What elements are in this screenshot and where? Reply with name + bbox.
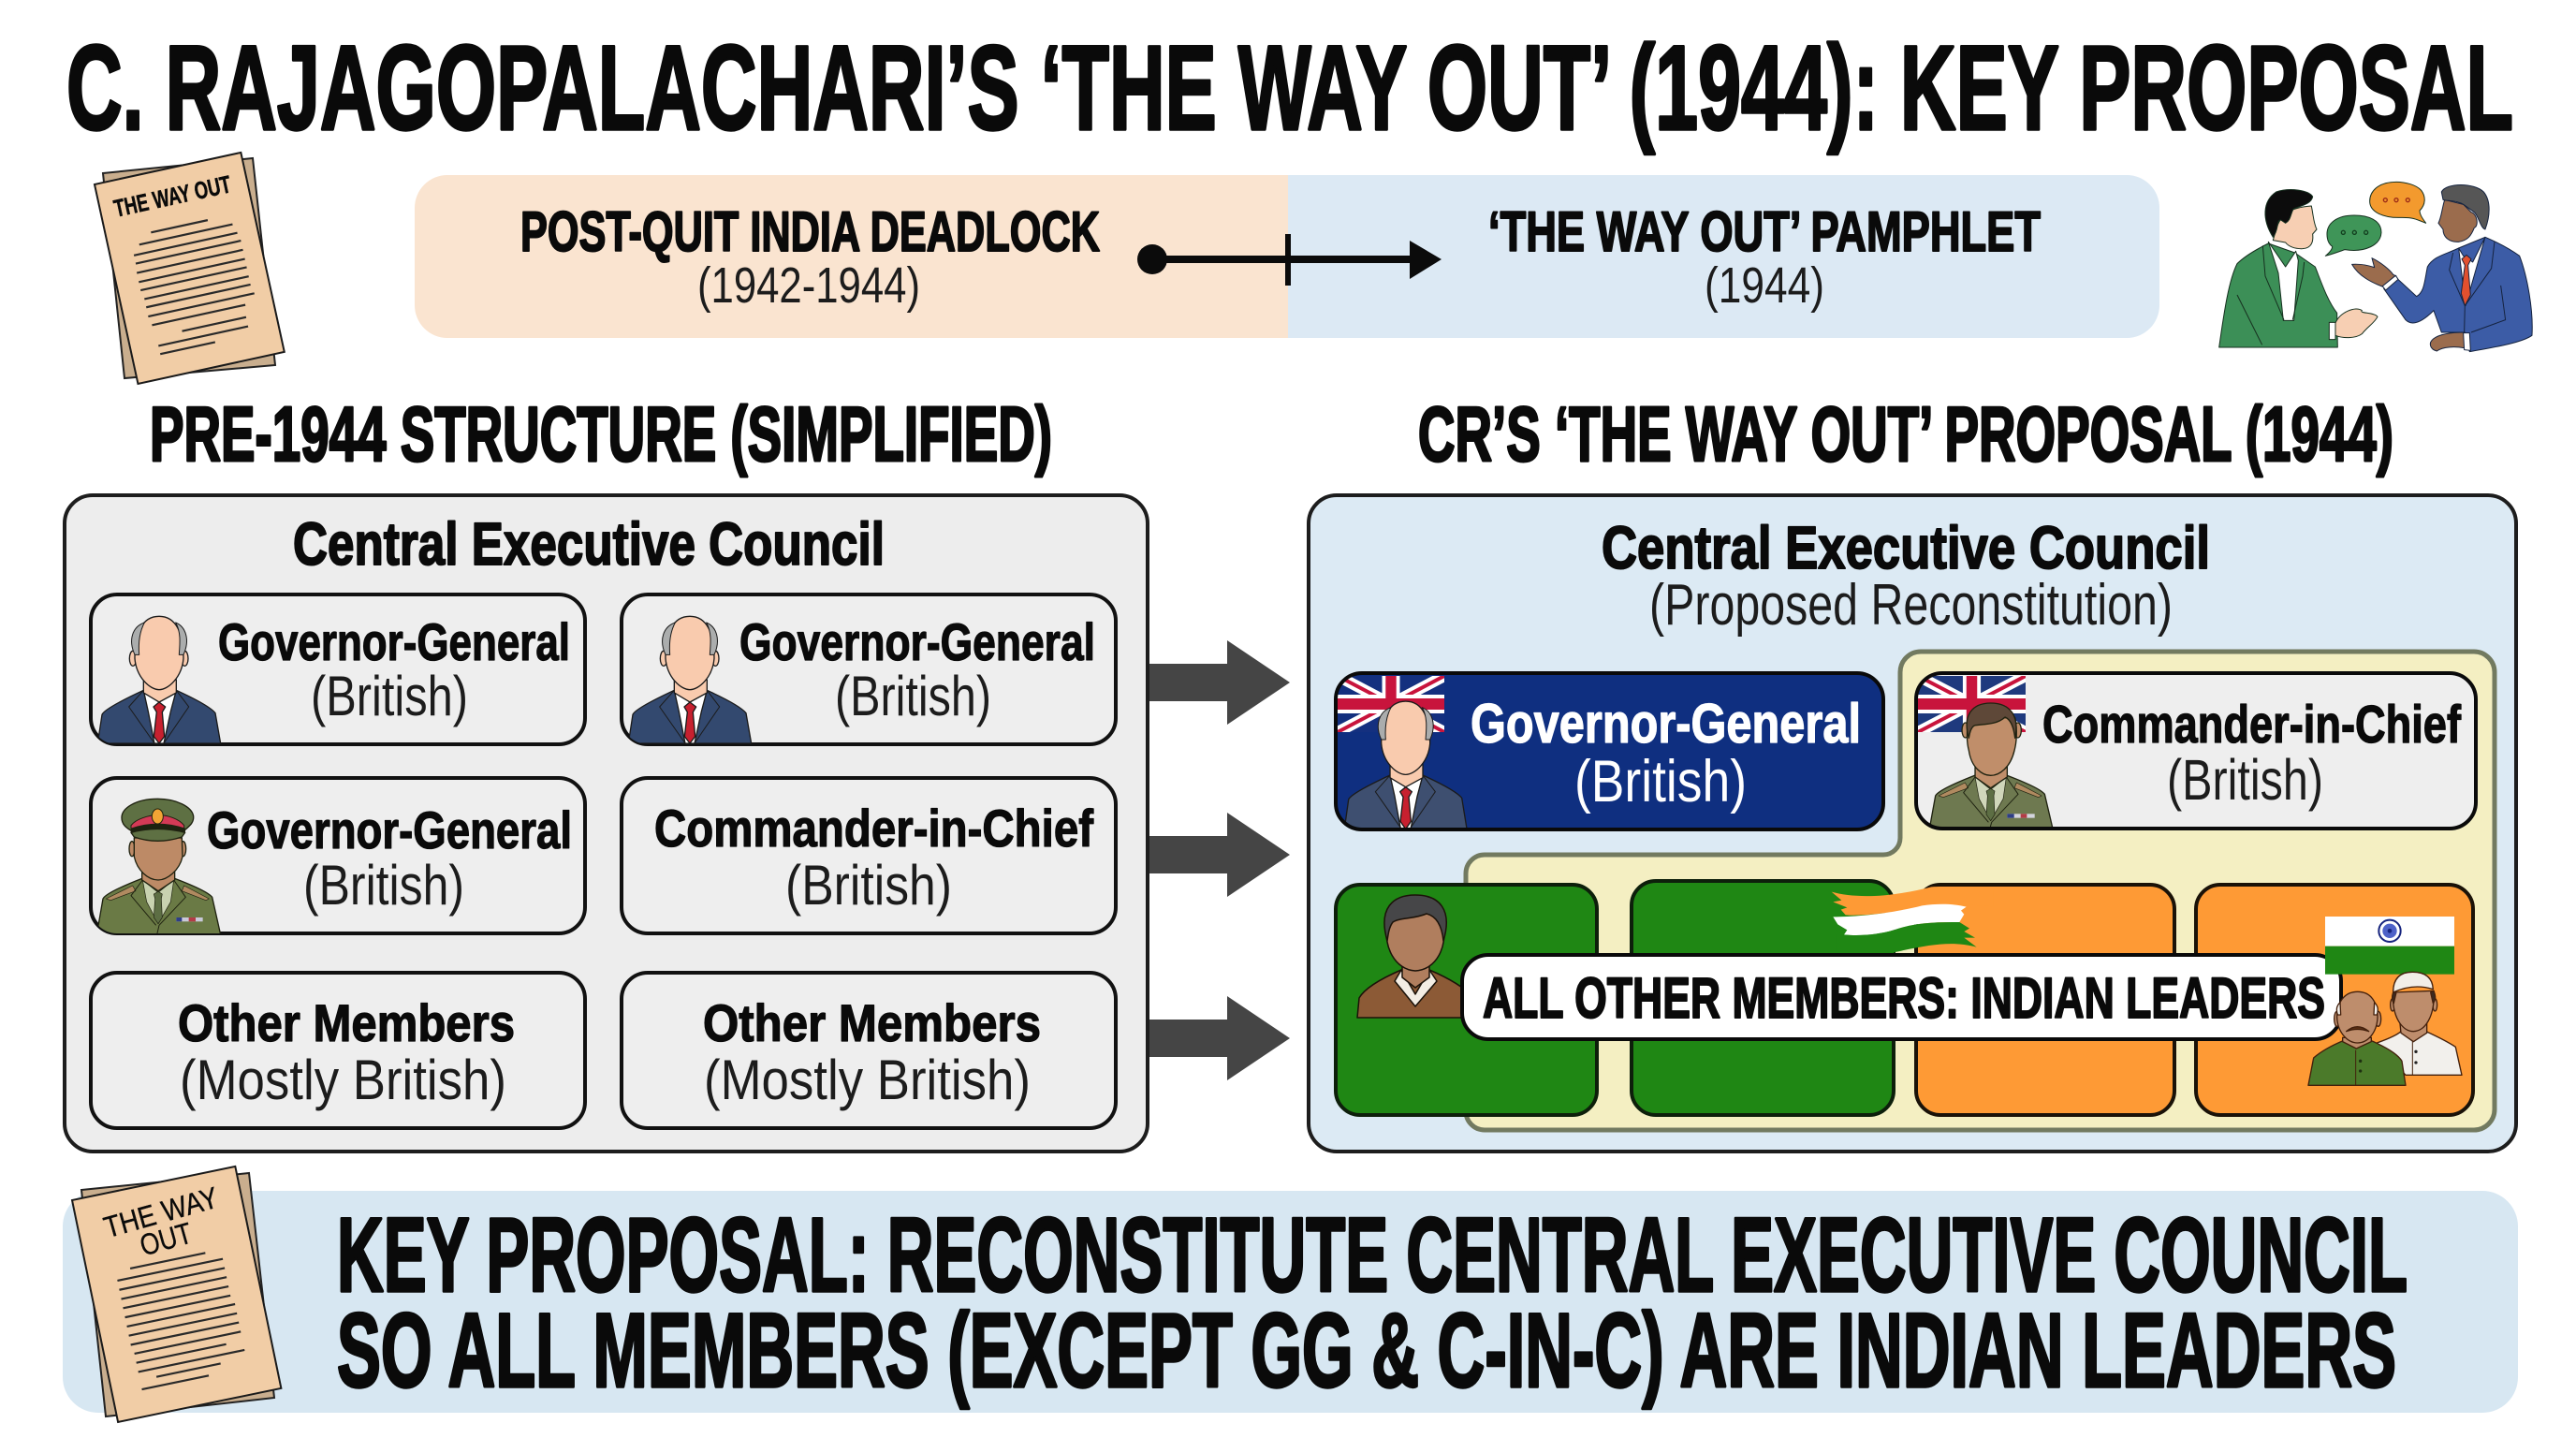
card: other members 1: (Mostly British) [180,1049,506,1111]
arrow: bottom [1149,996,1290,1080]
banner left: deadlock [415,175,1288,338]
card: commander-in-chief [1916,673,2476,830]
heading: pre-1944 structure: PRE-1944 STRUCTURE (SIMPLIFIED) [150,390,1052,477]
panel: pre-1944 council [65,495,1148,1152]
card: commander-in-chief: Commander-in-Chief [654,799,1093,858]
icon: pamphlet top left: THE WAY OUT [111,169,233,223]
right panel title [1602,514,2210,638]
card: governor-general 2: Governor-General [739,612,1095,671]
card: orange member 4 [2196,885,2473,1115]
banner right text [1488,200,2041,314]
card: commander-in-chief [622,778,1116,933]
card: governor-general military [91,778,585,934]
arrow: middle [1149,813,1290,897]
bottom key proposal banner [63,1167,2518,1422]
card: other members 2: Other Members [703,993,1041,1052]
panel: CR's proposed council [1309,495,2516,1152]
card: orange member 3 [1916,885,2174,1115]
banner left text: POST-QUIT INDIA DEADLOCK [520,200,1100,263]
speech bubble: green [2325,215,2381,256]
icon: pamphlet top left [95,153,285,384]
card: governor-general 2: (British) [835,665,991,727]
right panel title: Central Executive Council [1602,514,2210,581]
icon: pamphlet bottom: OUT [136,1216,196,1262]
card: governor-general 1: (British) [311,665,468,727]
card: governor-general: (British) [1574,749,1747,814]
card: governor-general 1 [91,594,585,744]
banner right text: ‘THE WAY OUT’ PAMPHLET [1488,200,2041,263]
card: governor-general military: (British) [303,854,464,917]
banner right: pamphlet [1288,175,2159,338]
graphic: waving tricolour ribbon [1832,887,1994,957]
icon: pamphlet bottom [72,1167,281,1422]
left panel title: Central Executive Council [293,510,885,578]
key proposal text [337,1196,2408,1409]
card: commander-in-chief: (British) [785,854,952,917]
portrait: military officer [96,799,221,934]
card: commander-in-chief: (British) [2167,748,2323,812]
left man [2219,190,2378,347]
card: green member 2 [1632,881,1894,1115]
card: governor-general: Governor-General [1471,693,1861,755]
banner left text [520,200,1100,314]
card: governor-general [1336,673,1883,830]
right man [2352,184,2532,352]
banner left text: (1942-1944) [697,257,920,314]
card: green member 1 [1336,885,1597,1115]
label pill: all other members [1462,955,2341,1039]
flag and portrait: commander-in-chief [1918,676,2053,830]
portrait: governor-general [628,616,752,743]
leader with white cap [2377,972,2462,1075]
highlighted backing area [1466,652,2495,1130]
card: other members 2 [622,973,1116,1128]
right panel title: (Proposed Reconstitution) [1649,573,2173,638]
flag and portrait: governor-general [1338,676,1467,830]
leader with moustache [2308,991,2406,1085]
card: other members 2: (Mostly British) [704,1049,1031,1111]
card: governor-general 2 [622,594,1116,744]
icon: pamphlet bottom: THE WAY [100,1181,222,1244]
timeline banner [415,175,2159,338]
indian flag [2325,917,2454,975]
card: commander-in-chief: Commander-in-Chief [2042,695,2462,755]
speech bubble: orange [2370,182,2426,223]
card: governor-general 1: Governor-General [218,612,570,671]
arrow: top [1149,640,1290,725]
portrait: governor-general [97,616,221,743]
flag and portraits: indian leaders [2308,917,2462,1085]
icon: two men talking [2219,182,2532,352]
card: other members 1: Other Members [178,993,515,1052]
banner right text: (1944) [1705,257,1824,314]
card: other members 1 [91,973,585,1128]
card: governor-general military: Governor-General [207,800,572,859]
arrow: timeline [1137,234,1442,286]
portrait: indian leader on green card [1357,895,1479,1018]
